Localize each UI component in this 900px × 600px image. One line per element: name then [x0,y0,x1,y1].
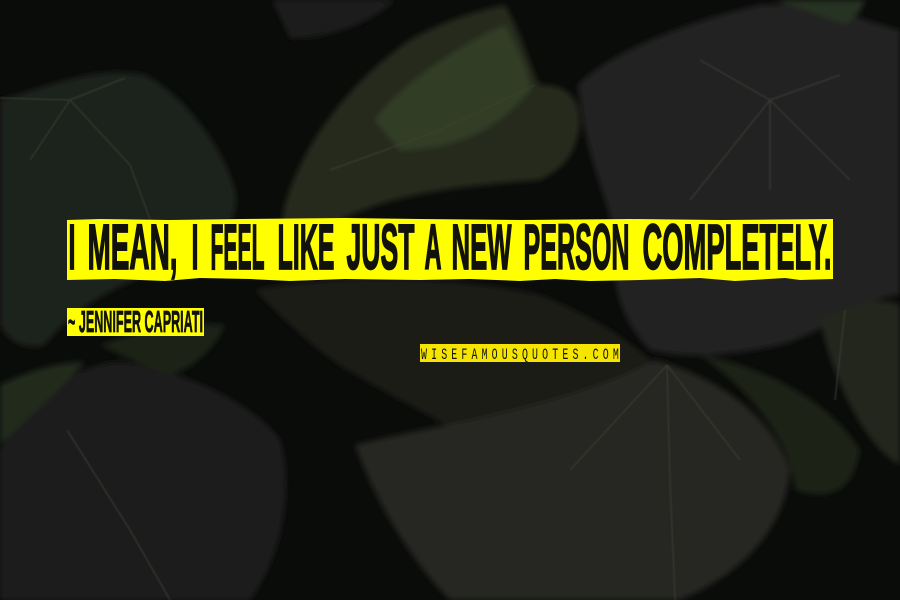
quote text: I [68,211,76,283]
quote text: JUST [346,211,414,283]
quote band [67,211,833,283]
quote text: NEW [452,211,512,283]
quote text: I [192,211,198,283]
quote text: MEAN, [88,211,178,283]
source text: WISEFAMOUSQUOTES.COM [421,346,619,364]
quote poster: ~ JENNIFER CAPRIATI [68,304,203,339]
quote text: A [424,211,442,283]
source badge [420,344,620,364]
quote text: FEEL [210,211,264,283]
attribution band [67,304,204,339]
quote text: PERSON [524,211,630,283]
quote text: LIKE [278,211,334,283]
quote text [68,211,832,283]
